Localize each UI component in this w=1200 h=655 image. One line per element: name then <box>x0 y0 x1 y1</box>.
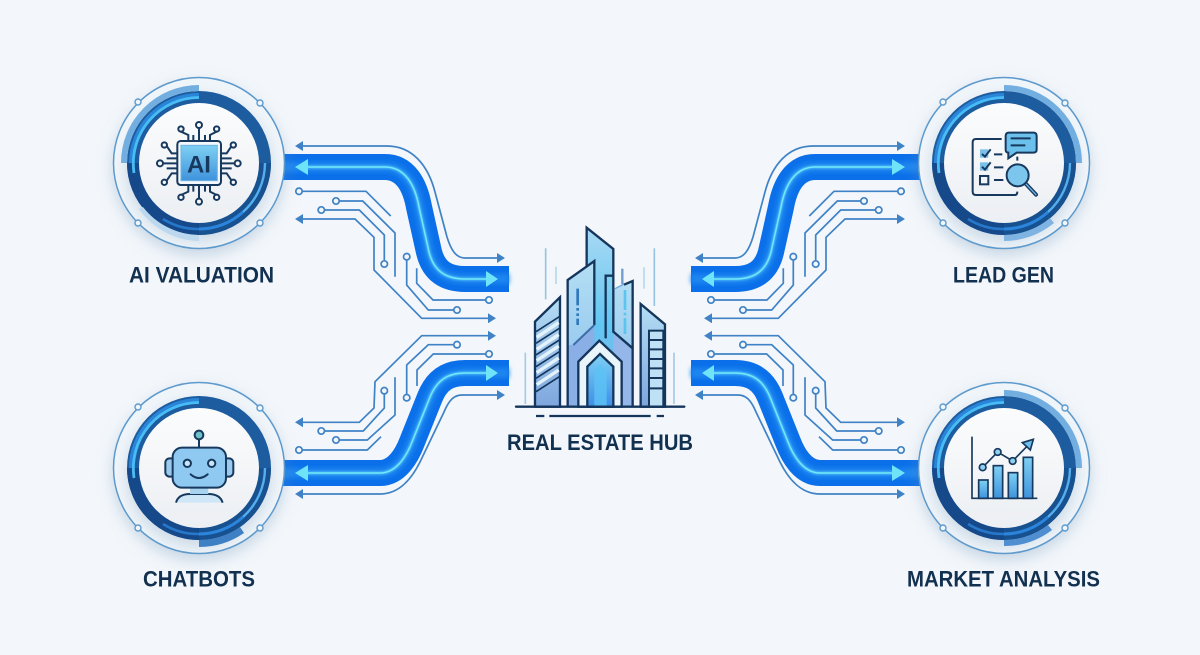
mid tower <box>568 261 594 407</box>
icon: checklist and magnifier <box>973 133 1037 195</box>
label: chatbots: CHATBOTS <box>143 566 255 592</box>
slim inner panel <box>606 276 613 338</box>
left block <box>535 297 560 407</box>
label: market analysis: MARKET ANALYSIS <box>907 566 1100 592</box>
house front <box>578 341 622 407</box>
label: real estate hub: REAL ESTATE HUB <box>507 430 693 455</box>
icon: robot <box>165 431 233 503</box>
icon: central building hub <box>516 228 684 416</box>
label: AI valuation: AI VALUATION <box>129 262 274 288</box>
right block <box>641 304 665 407</box>
connectors: right side <box>691 141 920 499</box>
node: AI valuation <box>114 78 284 248</box>
ground lines <box>516 403 684 410</box>
icon: bar chart <box>972 437 1037 498</box>
connectors: left side <box>280 141 509 499</box>
label: lead gen: LEAD GEN <box>953 262 1054 288</box>
node: market analysis <box>918 382 1090 554</box>
center tower <box>568 228 633 407</box>
icon: AI chip <box>157 122 241 205</box>
node: lead gen <box>918 78 1090 248</box>
right slim tower <box>613 281 633 407</box>
node: chatbots <box>114 382 284 554</box>
icon: AI chip: AI <box>187 151 211 178</box>
